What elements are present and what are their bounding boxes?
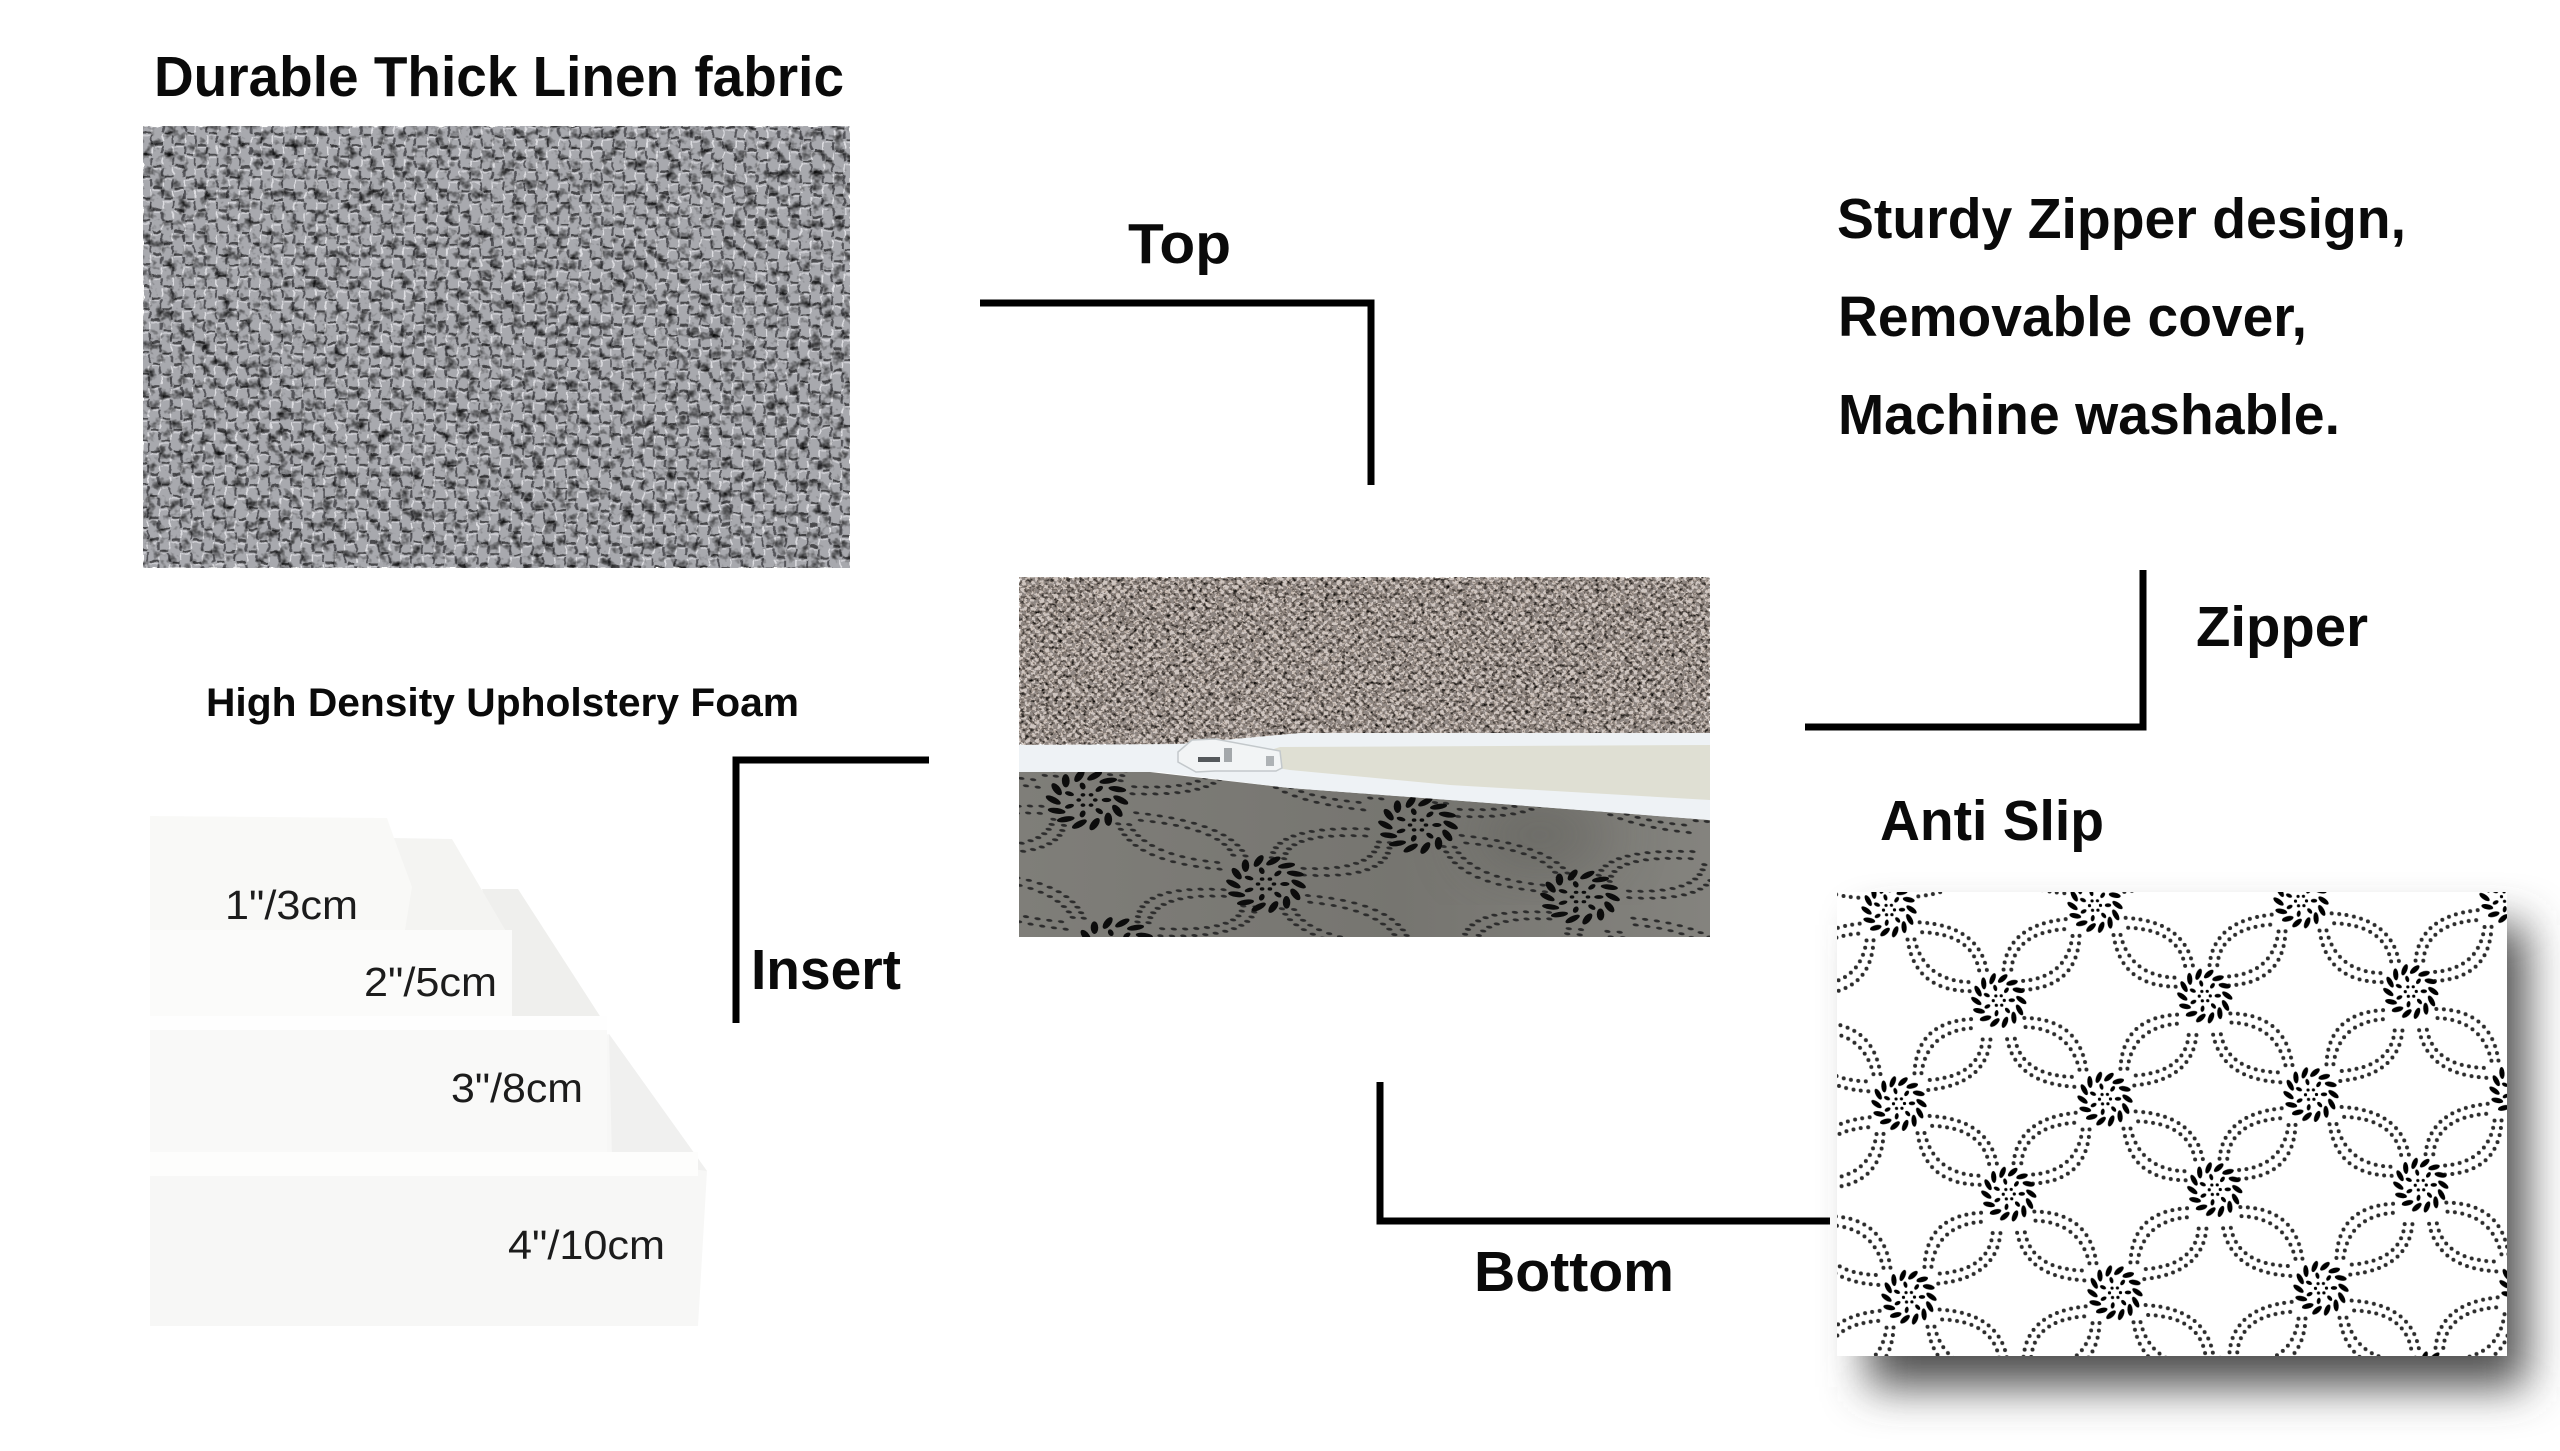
lower patterned fabric xyxy=(1019,772,1710,937)
text block: zipper features: Sturdy Zipper design, xyxy=(1837,187,2406,251)
text block: zipper features: Machine washable. xyxy=(1838,383,2340,447)
size labels: 3"/8cm xyxy=(451,1065,583,1111)
heading: anti slip: Anti Slip xyxy=(1880,789,2104,853)
arrow: bottom connector xyxy=(1380,1082,1830,1221)
size labels xyxy=(225,882,665,1268)
arrow: insert connector xyxy=(736,760,929,1023)
label: Bottom: Bottom xyxy=(1474,1240,1674,1304)
zipper slider xyxy=(1178,739,1282,772)
size labels: 4"/10cm xyxy=(508,1222,665,1268)
zipper tapes xyxy=(1019,733,1710,820)
upper linen fabric xyxy=(1019,577,1710,745)
foam 3 inch layer xyxy=(150,889,607,1152)
panel: foam insert xyxy=(150,681,799,1326)
arrow: top connector xyxy=(980,303,1371,485)
image: anti-slip dotted pattern xyxy=(1837,892,2507,1356)
text block: zipper features: Removable cover, xyxy=(1838,285,2307,349)
label: Top: Top xyxy=(1128,212,1231,276)
image: cushion cross-section with zipper xyxy=(1019,577,1710,976)
panel: top fabric xyxy=(143,45,850,568)
text block: zipper features xyxy=(1837,187,2406,447)
label: Insert: Insert xyxy=(751,938,901,1002)
size labels: 1"/3cm xyxy=(225,882,358,928)
heading: foam: High Density Upholstery Foam xyxy=(206,681,799,725)
exposed foam insert xyxy=(1250,744,1710,805)
foam 2 inch layer xyxy=(150,838,512,1016)
foam 1 inch layer xyxy=(150,816,412,930)
size labels: 2"/5cm xyxy=(364,959,497,1005)
label: Zipper: Zipper xyxy=(2196,595,2368,659)
panel shadow xyxy=(1868,925,2526,1387)
image: grey linen swatch xyxy=(143,126,850,568)
foam 4 inch layer xyxy=(150,1034,707,1326)
arrow: zipper connector xyxy=(1805,570,2143,727)
panel: anti slip xyxy=(1837,789,2526,1387)
heading: durable linen: Durable Thick Linen fabric xyxy=(154,45,844,109)
